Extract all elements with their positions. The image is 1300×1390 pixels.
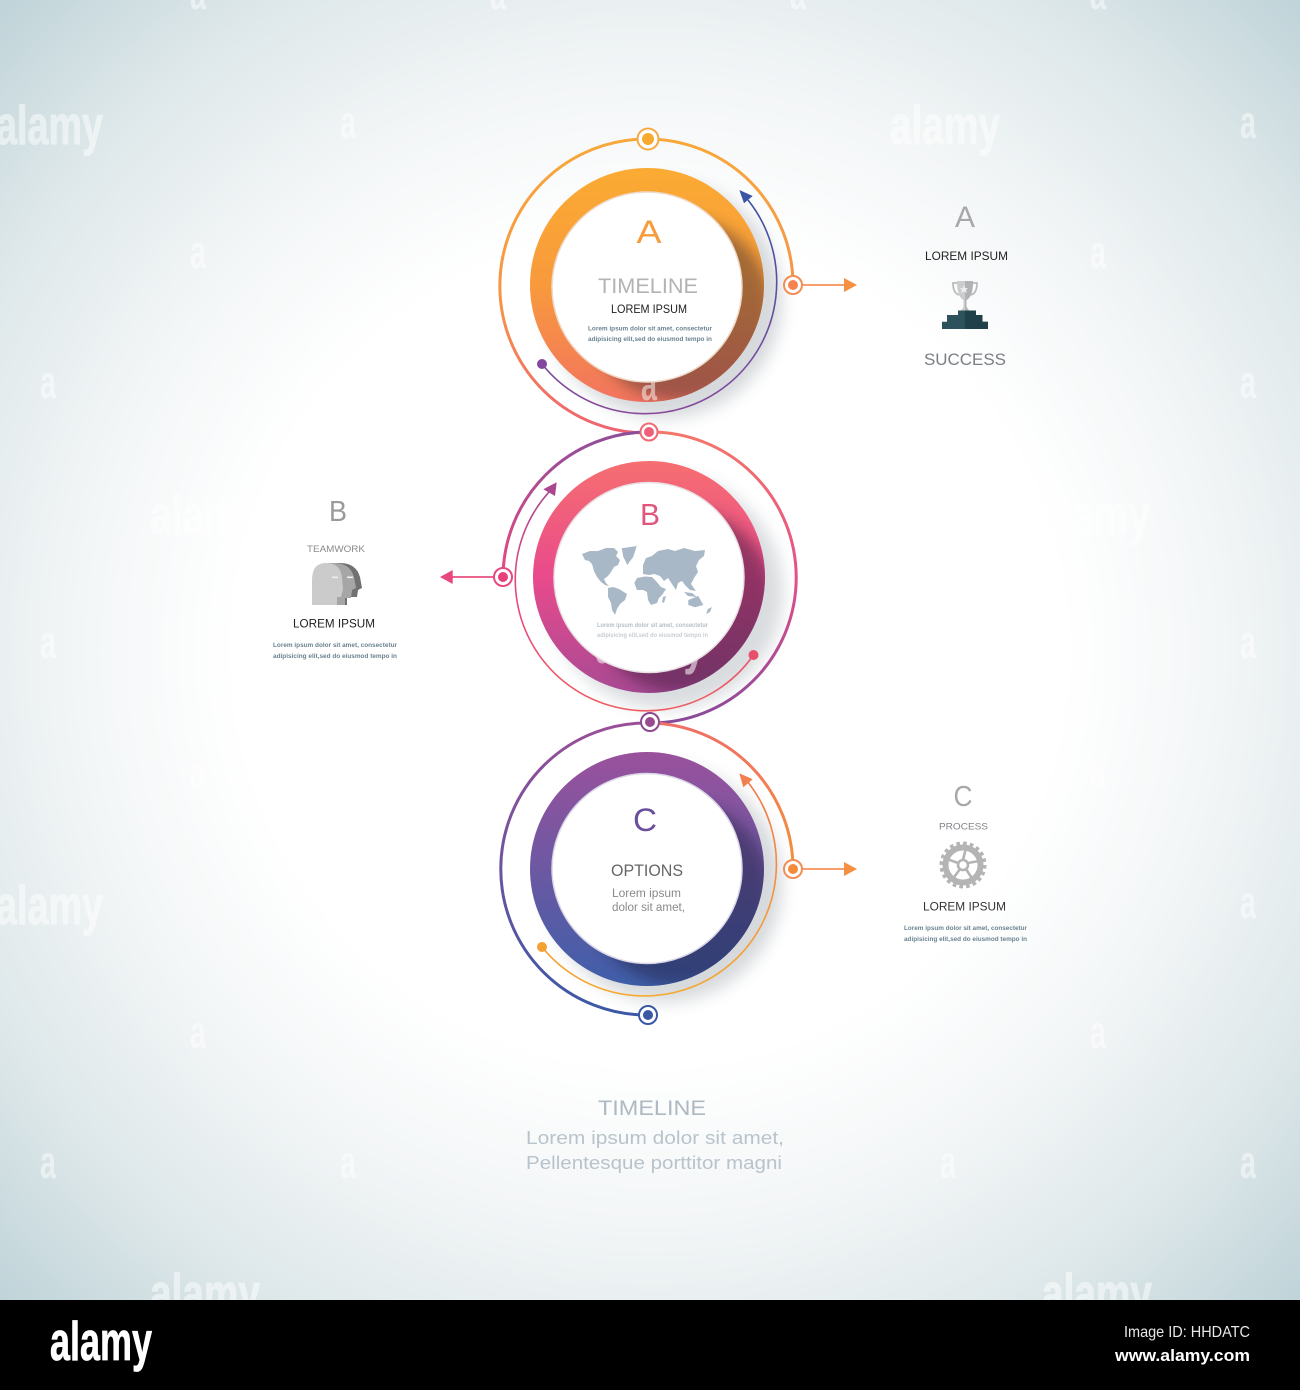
watermark pattern: a (1240, 1136, 1256, 1188)
watermark pattern: a (1240, 616, 1256, 668)
ring: B (533, 461, 765, 693)
footer logo: alamy (50, 1310, 152, 1372)
callout body text: adipisicing elit,sed do eiusmod tempo in (273, 653, 397, 660)
callout label SUCCESS: SUCCESS (924, 351, 1006, 369)
watermark pattern: alamy (1040, 484, 1150, 546)
icon: two heads (312, 563, 362, 605)
callout letter A: A (955, 201, 975, 234)
faint body text (597, 622, 708, 639)
watermark pattern: a (1240, 876, 1256, 928)
panel: step C circle (530, 752, 782, 1002)
callout body text: Lorem ipsum dolor sit amet, consectetur (273, 642, 397, 649)
arrow: C to right (784, 860, 857, 878)
watermark pattern: a (340, 96, 356, 148)
callout letter B: B (329, 496, 347, 528)
heading: TIMELINE: TIMELINE (598, 275, 698, 298)
inner arrow arc C (537, 773, 776, 996)
watermark pattern: a (1240, 96, 1256, 148)
watermark pattern: a (40, 616, 56, 668)
disc: A (552, 192, 742, 382)
callout body text (273, 642, 397, 660)
faint body text: adipisicing elit,sed do eiusmod tempo in (597, 632, 708, 639)
callout: A success (924, 201, 1008, 369)
black footer bar (0, 1300, 1300, 1390)
watermark pattern: alamy (0, 94, 103, 156)
body text (588, 326, 712, 343)
body text: Lorem ipsum dolor sit amet, consectetur (588, 326, 712, 332)
watermark pattern: a (1240, 356, 1256, 408)
node: A to B (640, 424, 658, 440)
footer text (526, 1128, 784, 1173)
ring: A (530, 168, 764, 402)
inner arrow arc A (537, 190, 777, 414)
callout subheading: LOREM IPSUM (925, 251, 1008, 263)
watermark pattern: a (1090, 1006, 1106, 1058)
panel: step A circle (530, 168, 782, 418)
watermark pattern: a (940, 616, 956, 668)
watermark pattern: alamy (890, 94, 1000, 156)
callout body text: Lorem ipsum dolor sit amet, consectetur (904, 925, 1027, 932)
callout subheading: LOREM IPSUM (293, 618, 375, 630)
watermark pattern: a (340, 1136, 356, 1188)
footer text: Lorem ipsum dolor sit amet, (526, 1128, 784, 1148)
label: C letter: C (633, 802, 657, 838)
callout subheading: LOREM IPSUM (923, 902, 1006, 914)
footer text: Pellentesque porttitor magni (526, 1153, 782, 1173)
icon: trophy on podium (942, 281, 988, 329)
callout: B teamwork (273, 496, 397, 660)
subheading: LOREM IPSUM (611, 304, 687, 316)
callout body text: adipisicing elit,sed do eiusmod tempo in (904, 936, 1027, 943)
watermark pattern: alamy (0, 874, 103, 936)
callout body text (904, 925, 1027, 943)
watermark pattern: a (190, 226, 206, 278)
ring: C (530, 752, 764, 986)
watermark pattern: a (940, 1136, 956, 1188)
body text (612, 888, 685, 914)
footer title: TIMELINE (598, 1097, 706, 1120)
icon: gear (942, 844, 984, 886)
watermark fragment: a (641, 358, 657, 410)
arrow: A to right (784, 276, 857, 294)
node: top A (638, 128, 658, 150)
website: www.alamy.com (1114, 1346, 1250, 1365)
watermark pattern: alamy (1042, 1262, 1152, 1324)
callout label PROCESS: PROCESS (939, 822, 988, 832)
watermark pattern: a (940, 356, 956, 408)
label: A letter: A (636, 214, 662, 250)
watermark pattern: a (340, 356, 356, 408)
callout: C process (904, 781, 1027, 943)
watermark pattern: alamy (150, 1262, 260, 1324)
watermark pattern: a (340, 876, 356, 928)
disc: B (554, 482, 744, 672)
watermark pattern: alamy (150, 484, 260, 546)
connector arcs (500, 139, 796, 1015)
node: B to C (641, 713, 659, 731)
faint body text: Lorem ipsum dolor sit amet, consectetur (597, 622, 708, 629)
panel: step B circle (533, 461, 783, 709)
heading: OPTIONS: OPTIONS (611, 862, 683, 880)
node: bottom C (639, 1006, 657, 1024)
body text: adipisicing elit,sed do eiusmod tempo in (588, 336, 712, 343)
watermark pattern: a (190, 746, 206, 798)
image id: Image ID: HHDATC (1124, 1324, 1250, 1341)
world map (582, 546, 712, 615)
callout letter C: C (954, 781, 972, 813)
body text: dolor sit amet, (612, 902, 685, 914)
watermark pattern: a (40, 1136, 56, 1188)
disc: C (552, 774, 742, 964)
watermark pattern: a (1090, 746, 1106, 798)
callout label TEAMWORK: TEAMWORK (307, 544, 366, 555)
body text: Lorem ipsum (612, 888, 681, 900)
arrow: B to left (440, 568, 512, 586)
watermark pattern: a (190, 1006, 206, 1058)
watermark pattern: a (1090, 226, 1106, 278)
watermark pattern: a (40, 356, 56, 408)
label: B letter: B (640, 497, 660, 532)
watermark fragment: alamy (595, 613, 705, 675)
inner arrow arc B (515, 482, 758, 711)
